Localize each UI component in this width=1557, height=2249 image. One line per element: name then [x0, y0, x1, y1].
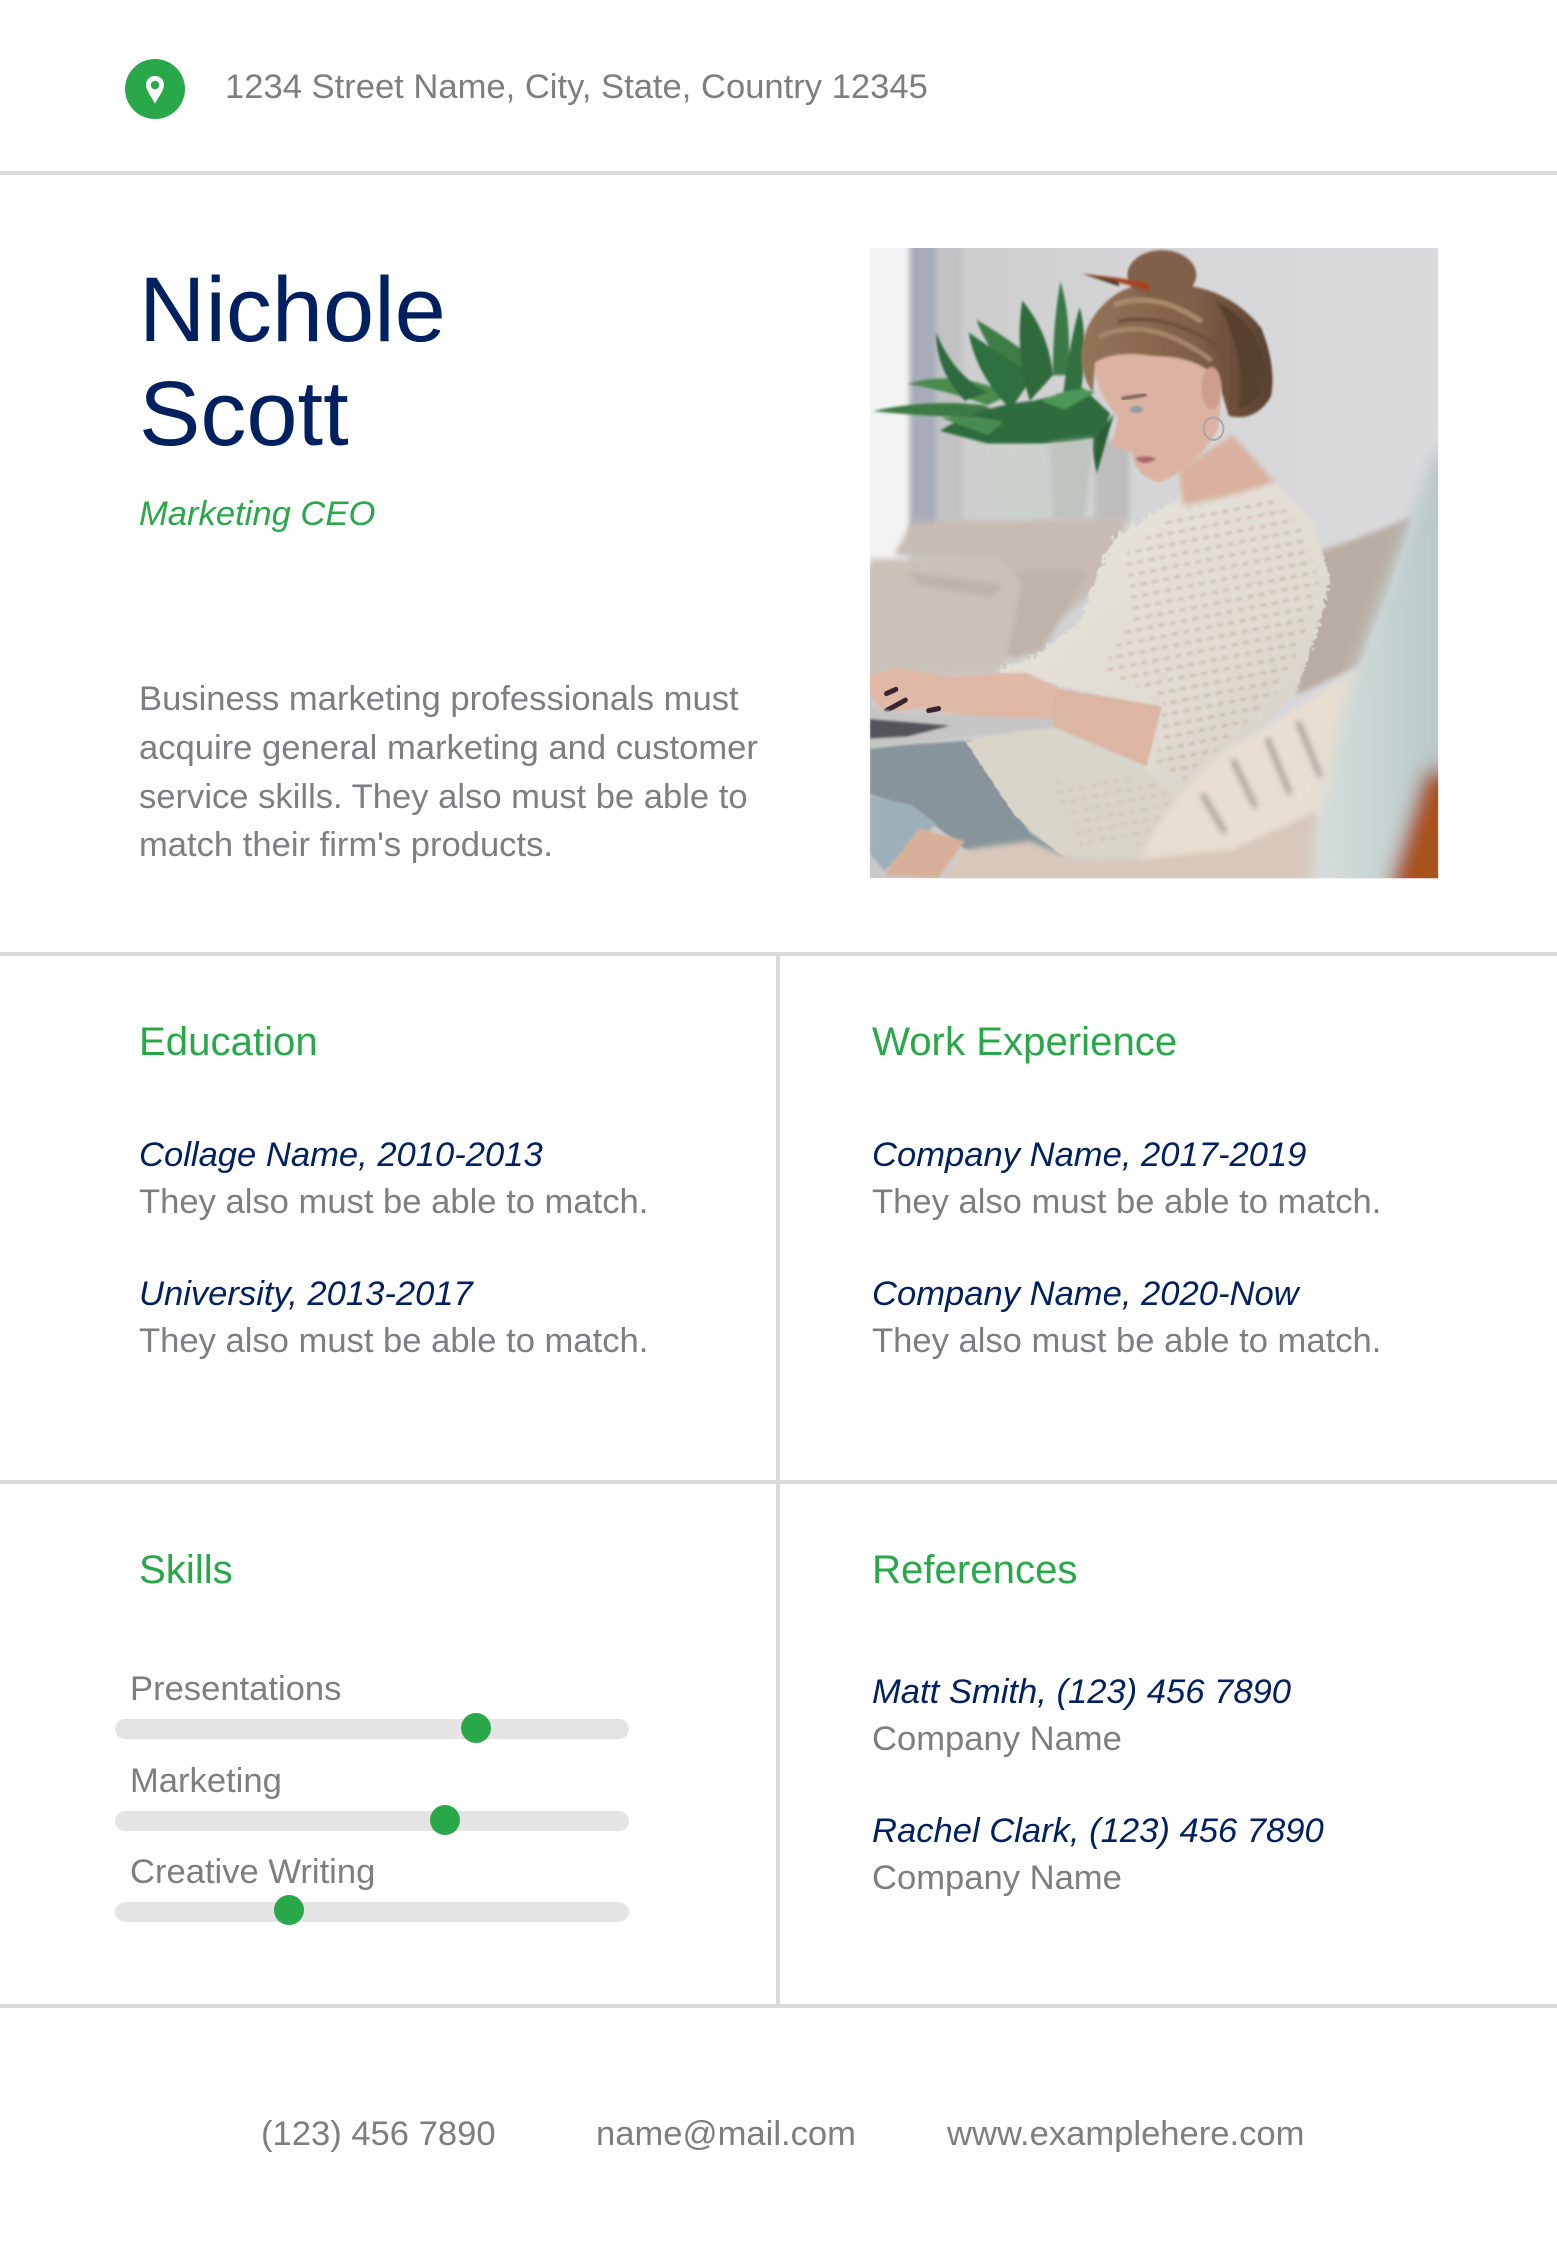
reference 1: Matt Smith, (123) 456 7890: [872, 1672, 1291, 1710]
reference 2: Rachel Clark, (123) 456 7890: [872, 1812, 1324, 1850]
summary text: match their firm's products.: [139, 826, 553, 864]
front cushion and blanket: [939, 678, 1352, 878]
name heading: [139, 259, 446, 465]
skill: creative writing: Creative Writing: [130, 1853, 375, 1891]
icon: location pin: [125, 59, 185, 119]
work experience heading: Work Experience: [872, 1019, 1177, 1064]
skills heading: Skills: [139, 1547, 233, 1592]
name heading: Scott: [139, 363, 349, 465]
references heading: References: [872, 1546, 1078, 1592]
plant: [873, 281, 1114, 474]
work entry 1: Company Name, 2017-2019: [872, 1136, 1306, 1174]
sweater: [965, 726, 1183, 858]
education entry 1: Collage Name, 2010-2013: [139, 1136, 543, 1174]
panel: work experience: They also must be able to match.: [872, 1182, 1381, 1220]
summary text: service skills. They also must be able to: [139, 778, 748, 816]
panel: education: They also must be able to match.: [139, 1322, 648, 1360]
neck and face: [1179, 435, 1275, 506]
address: 1234 Street Name, City, State, Country 12345: [225, 68, 928, 106]
blurred foreground: [1306, 448, 1438, 878]
panel: skills: [115, 1547, 629, 1925]
skill: marketing: Marketing: [130, 1762, 282, 1800]
arms and laptop: [1046, 687, 1162, 767]
photo: woman working on laptop on sofa: [870, 248, 1438, 878]
work entry 2: Company Name, 2020-Now: [872, 1274, 1299, 1312]
summary text: [139, 680, 758, 864]
footer: email: name@mail.com: [596, 2114, 856, 2152]
footer: phone: (123) 456 7890: [261, 2114, 496, 2152]
panel: education: [139, 1019, 648, 1360]
jeans: [870, 741, 1068, 858]
education entry 2: University, 2013-2017: [139, 1274, 473, 1312]
sofa and pillows: [870, 516, 1412, 696]
skill: presentations: Presentations: [130, 1670, 341, 1708]
panel: work experience: They also must be able to match.: [872, 1322, 1381, 1360]
summary text: Business marketing professionals must: [139, 680, 739, 718]
education heading: Education: [139, 1019, 318, 1064]
footer: website: www.examplehere.com: [947, 2114, 1304, 2152]
summary text: acquire general marketing and customer: [139, 729, 758, 767]
panel: references: Company Name: [872, 1858, 1122, 1896]
hair: [1081, 250, 1272, 417]
job title: Marketing CEO: [139, 495, 375, 533]
panel: references: [872, 1546, 1324, 1896]
panel: work experience: [872, 1019, 1381, 1360]
panel: education: They also must be able to match.: [139, 1182, 648, 1220]
name heading: Nichole: [139, 259, 446, 361]
panel: references: Company Name: [872, 1720, 1122, 1758]
